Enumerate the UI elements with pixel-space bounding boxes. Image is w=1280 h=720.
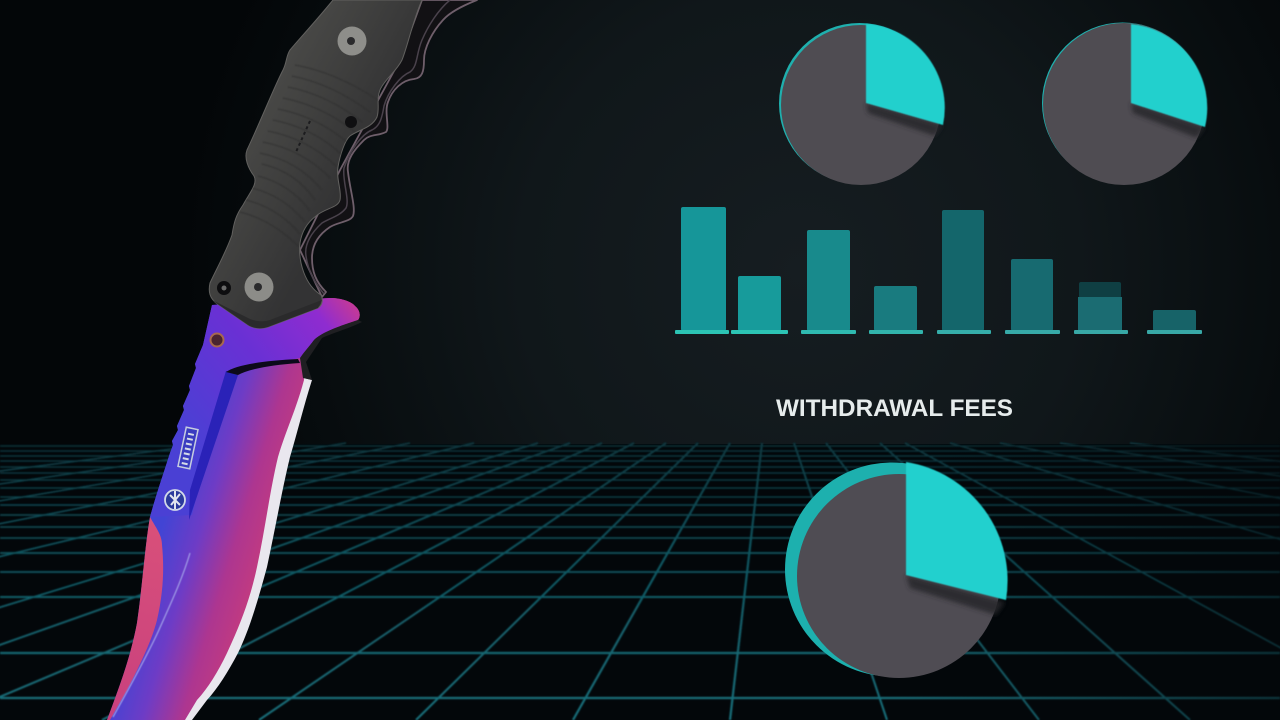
handle scale [209, 0, 422, 328]
bar baselines [675, 330, 1202, 334]
handle bolster edge [212, 300, 322, 328]
small screw: lower left [217, 281, 231, 295]
knife [107, 0, 477, 720]
wedge shadow [906, 575, 1005, 615]
ricasso shadow edge [300, 320, 362, 380]
heading: withdrawal fees: WITHDRAWAL FEES [776, 395, 1013, 422]
blade rivet [210, 334, 224, 346]
handle grip ridges [240, 65, 378, 222]
large screw: bottom [244, 272, 274, 302]
knife blade [107, 298, 362, 720]
bars [681, 207, 1196, 331]
pie chart: top left [779, 23, 945, 185]
blade edge: white bevel [170, 378, 312, 720]
handle etched marks [296, 121, 310, 152]
blade body [107, 298, 360, 720]
cyan wedge [906, 462, 1008, 600]
fuller: dark blue groove [189, 371, 238, 520]
blade spine and tang [150, 298, 360, 517]
blade highlight line [113, 553, 190, 717]
wedge shadow [1131, 103, 1205, 138]
wedge shadow [866, 103, 943, 136]
small screw: middle [345, 116, 357, 128]
cyan wedge [866, 24, 945, 125]
engraved maker stamp [178, 427, 198, 469]
knife handle [209, 0, 477, 328]
pie chart: top right [1042, 22, 1207, 185]
fuller top shadow [226, 359, 300, 375]
handle back liner [300, 0, 477, 297]
large screw: top [338, 26, 366, 56]
engraved round emblem [165, 490, 185, 510]
cyan wedge [1131, 24, 1207, 127]
handle liner second layer [306, 0, 450, 294]
bar chart [675, 207, 1202, 334]
perspective grid floor [0, 443, 1280, 720]
blade belly: pink [107, 517, 163, 720]
pie chart: bottom [785, 462, 1008, 678]
